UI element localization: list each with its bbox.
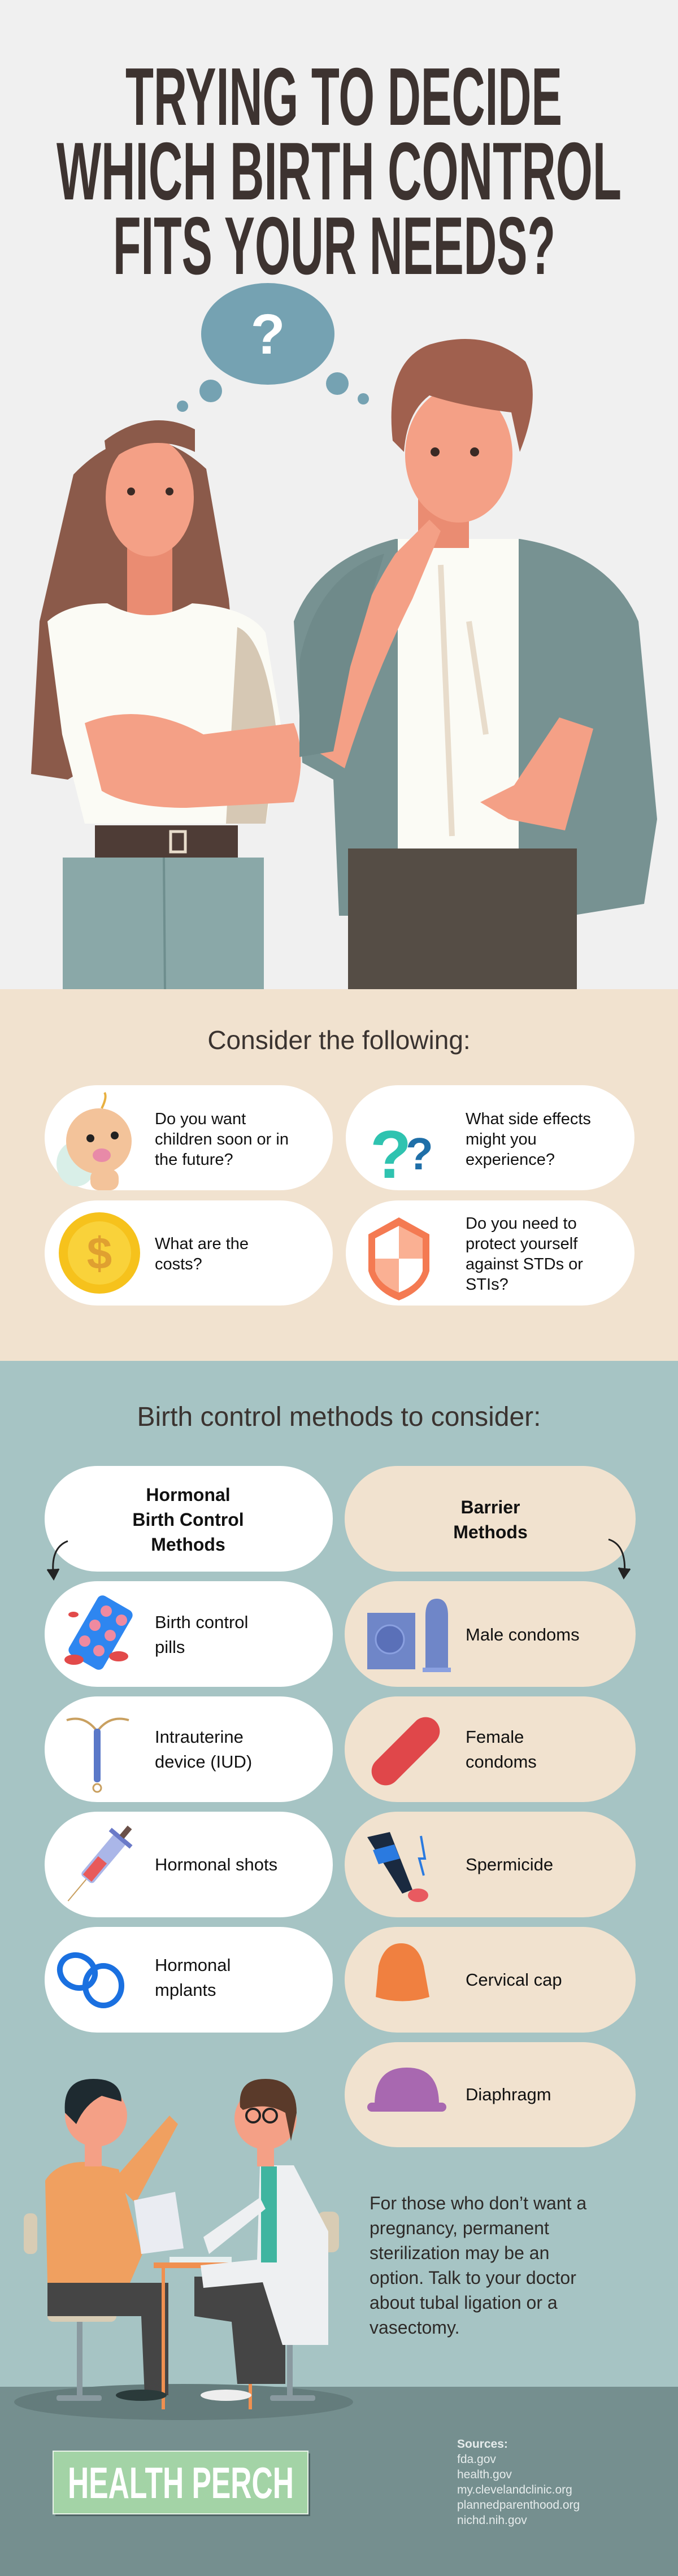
header pill: barrier: Methods (453, 1522, 528, 1542)
header pill: hormonal (45, 1466, 333, 1572)
text block: sterilization note: vasectomy. (370, 2317, 459, 2338)
text block: sterilization note: sterilization may be an (370, 2243, 549, 2263)
text block: sterilization note: about tubal ligation or a (370, 2292, 558, 2313)
method: female condoms: condoms (466, 1752, 537, 1772)
method: cervical cap (345, 1927, 636, 2033)
method: spermicide: Spermicide (466, 1855, 553, 1874)
text block: sterilization note: For those who don’t want a (370, 2193, 586, 2213)
icon: spermicide tube (367, 1832, 428, 1902)
icon: question marks: ? (370, 1117, 411, 1193)
icon: pill pack (64, 1594, 134, 1672)
background: methods section (0, 1361, 678, 2387)
arrow: left curved (47, 1541, 68, 1579)
method: female condoms (345, 1696, 636, 1802)
method: hormonal implants: mplants (155, 1980, 216, 2000)
logo: health perch: HEALTH PERCH (68, 2458, 294, 2508)
method: IUD (45, 1696, 333, 1802)
method: birth control pills (45, 1581, 333, 1687)
card: side effects: experience? (466, 1151, 555, 1169)
logo: health perch (53, 2451, 310, 2516)
background: top section (0, 0, 678, 989)
icon: coin: $ (87, 1228, 112, 1278)
sources: Sources: (457, 2438, 508, 2451)
heading: consider the following: Consider the following: (207, 1025, 471, 1055)
method: hormonal implants (45, 1927, 333, 2033)
icon: female condom (366, 1711, 446, 1791)
header pill: hormonal: Methods (151, 1534, 225, 1555)
method: IUD: device (IUD) (155, 1752, 252, 1772)
title (56, 51, 621, 291)
icon: shield (368, 1217, 429, 1300)
method: birth control pills: pills (155, 1637, 185, 1657)
method: diaphragm (345, 2042, 636, 2147)
card: costs: costs? (155, 1255, 202, 1273)
method: diaphragm: Diaphragm (466, 2085, 551, 2104)
method: male condoms: Male condoms (466, 1625, 580, 1644)
illustration: woman (31, 420, 301, 989)
card: costs: What are the (155, 1235, 249, 1253)
method: hormonal shots (45, 1812, 333, 1917)
method: male condoms (345, 1581, 636, 1687)
card: side effects (346, 1085, 634, 1193)
card: side effects: What side effects (466, 1110, 591, 1128)
method: spermicide (345, 1812, 636, 1917)
method: hormonal shots: Hormonal shots (155, 1855, 277, 1874)
illustration: man (294, 339, 657, 989)
card: children: the future? (155, 1151, 233, 1169)
icon: baby (56, 1093, 132, 1190)
icon: IUD (67, 1718, 129, 1792)
card: children (45, 1085, 333, 1190)
background: floor footer (0, 2387, 678, 2576)
method: IUD: Intrauterine (155, 1727, 244, 1747)
text block: sterilization note: option. Talk to your doctor (370, 2268, 576, 2288)
card: side effects: might you (466, 1130, 537, 1148)
sources: health.gov (457, 2468, 512, 2481)
header pill: barrier: Barrier (461, 1497, 520, 1517)
card: children: Do you want (155, 1110, 246, 1128)
arrow: right curved (609, 1539, 630, 1578)
card: STDs (346, 1200, 634, 1306)
header pill: hormonal: Hormonal (146, 1485, 231, 1505)
illustration: patient and doctor (14, 2079, 353, 2420)
sources (457, 2438, 580, 2527)
icon: condom packet (367, 1599, 451, 1672)
icon: diaphragm (367, 2068, 446, 2112)
method: birth control pills: Birth control (155, 1612, 248, 1632)
heading: methods to consider: Birth control methods to consider: (137, 1402, 541, 1432)
method: hormonal implants: Hormonal (155, 1955, 231, 1975)
card: STDs: Do you need to (466, 1215, 577, 1233)
icon: question marks (370, 1117, 433, 1193)
header pill: barrier (345, 1466, 636, 1572)
icon: coin (59, 1212, 140, 1294)
icon: syringe (58, 1818, 140, 1910)
card: children: children soon or in (155, 1130, 289, 1148)
icon: thought bubble (177, 283, 369, 412)
sources: fda.gov (457, 2453, 496, 2466)
card: costs (45, 1200, 333, 1306)
method: cervical cap: Cervical cap (466, 1970, 562, 1990)
background: consider section (0, 989, 678, 1361)
text block: sterilization note: pregnancy, permanent (370, 2218, 549, 2238)
icon: question marks: ? (406, 1129, 433, 1179)
method: female condoms: Female (466, 1727, 524, 1747)
card: STDs: against STDs or (466, 1255, 583, 1273)
icon: rings (54, 1949, 121, 2005)
card: STDs: STIs? (466, 1276, 508, 1294)
sources: plannedparenthood.org (457, 2499, 580, 2512)
card: STDs: protect yourself (466, 1235, 578, 1253)
icon: thought bubble: ? (250, 303, 285, 366)
sources: my.clevelandclinic.org (457, 2483, 572, 2496)
header pill: hormonal: Birth Control (132, 1509, 244, 1530)
icon: cervical cap (376, 1943, 429, 2001)
sources: nichd.nih.gov (457, 2514, 527, 2527)
